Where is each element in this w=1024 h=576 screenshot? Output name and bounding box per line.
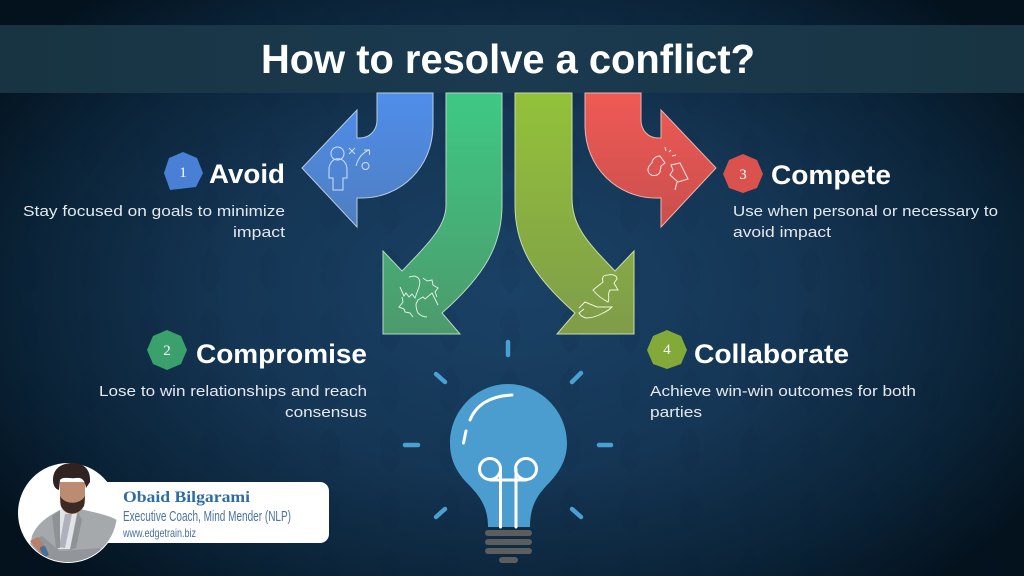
description: avoid: impact	[233, 224, 286, 241]
badge 2: 2	[163, 343, 171, 359]
description: compete: Use when personal or necessary to	[733, 203, 998, 220]
badge 1: 1	[179, 165, 187, 181]
description: collaborate: Achieve win-win outcomes for both	[650, 383, 916, 400]
heading: compromise: Compromise	[196, 339, 367, 369]
title band	[0, 25, 1024, 93]
arrow: avoid (blue)	[302, 93, 433, 227]
description: compete: avoid impact	[733, 224, 832, 241]
description: collaborate	[650, 383, 916, 421]
item: compete	[723, 154, 998, 241]
icon: boxing gloves	[648, 147, 688, 190]
description: compromise: consensus	[285, 404, 367, 421]
heading: avoid: Avoid	[209, 159, 285, 189]
badge 4	[647, 330, 687, 369]
icon: strategy person	[329, 147, 370, 190]
arrow: compete (red)	[585, 93, 716, 227]
item: compromise	[99, 330, 367, 421]
icon: puzzle and hand	[579, 275, 618, 318]
badge 2	[147, 330, 187, 370]
website: www.edgetrain.biz	[122, 526, 196, 540]
author card	[18, 463, 329, 566]
badge 3	[723, 154, 763, 193]
badge 3: 3	[739, 167, 747, 183]
icon: fists	[399, 276, 438, 317]
arrow: collaborate (lime)	[515, 93, 634, 334]
title: How to resolve a conflict?	[261, 36, 755, 82]
author portrait	[18, 463, 118, 566]
author role: Executive Coach, Mind Mender (NLP)	[123, 508, 291, 525]
heading: collaborate: Collaborate	[694, 339, 849, 369]
heading: compete: Compete	[771, 160, 891, 190]
item: collaborate	[647, 330, 916, 421]
description: compromise	[99, 383, 367, 421]
description: avoid: Stay focused on goals to minimize	[23, 203, 285, 220]
arrow: compromise (green)	[383, 93, 502, 334]
description: compromise: Lose to win relationships and reach	[99, 383, 367, 400]
badge 4: 4	[663, 342, 671, 358]
description: avoid	[23, 203, 286, 241]
badge 1	[164, 152, 203, 190]
description: compete	[733, 203, 998, 241]
description: collaborate: parties	[650, 404, 702, 421]
item: avoid	[23, 152, 286, 241]
author name: Obaid Bilgarami	[123, 489, 251, 506]
icon: light bulb	[405, 342, 611, 563]
